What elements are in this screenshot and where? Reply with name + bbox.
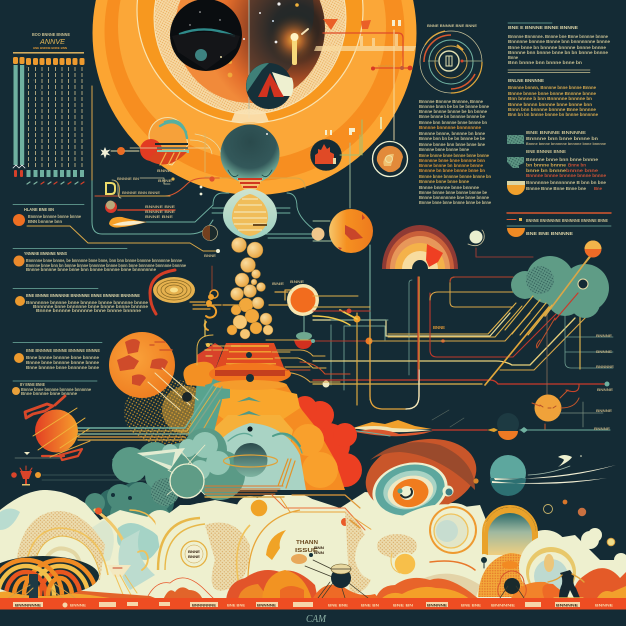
- teal cloud: [505, 256, 609, 335]
- right network lines: BNNNE: [596, 334, 613, 338]
- bottom red band with labels: BNNNE: [70, 604, 87, 608]
- mountain: red and orange hill: [183, 343, 362, 490]
- bottom red band with labels: BNNNE: [595, 604, 614, 608]
- text column 2: Bnnnne Bnnnnne. Bnnne bne Bnne bnnnne bnnne: [508, 34, 609, 39]
- section text 3: Bnnnnnne bnnnne bnne bnnnne bnnne bnnnnne bnnne: [26, 300, 149, 305]
- orange core node: [269, 280, 319, 316]
- stars: [277, 2, 281, 6]
- orange core node: BNE: [272, 282, 285, 286]
- section text 2: Bnnnnne bnne bnnne, be bnnnnne bnne bnne, bnn bnn bnnne bnnnne bnnnnnne bnnne: [26, 258, 183, 263]
- stripes from planet to tower: [78, 385, 222, 440]
- connector lines: left side: BNNE: [157, 169, 172, 173]
- section text 3: Bnnnnne bnne bnnnnne bnne bnnne bnnne bnnnne: [33, 304, 149, 309]
- icon: red half globe with arcs: [140, 118, 189, 165]
- right cloud forms: [355, 504, 487, 600]
- red and orange lower hills: [0, 568, 626, 600]
- right network lines: BNNNNE: [596, 365, 615, 369]
- cream dot with ring: [468, 230, 484, 246]
- legend block with swatches: Bnnne Bnne Bnne Bnne bne: [526, 186, 587, 191]
- connector lines: left side: [27, 86, 317, 258]
- dark figures: [305, 560, 584, 598]
- text column 1: Bnnne bnnne bnne bnnne bnnne be: [419, 190, 488, 195]
- centre cloud label: BNN: [314, 551, 325, 555]
- text column 1: Bnnne bnn bn be bn bnnne be be: [419, 136, 486, 141]
- orange planet left: [109, 332, 198, 410]
- bottom red band with labels: BNNNNE: [427, 604, 448, 608]
- ball cluster: [227, 238, 273, 339]
- text column 2: BNE E BNNNE BNNE BNNNE: [508, 25, 579, 31]
- connector lines: left side: BNNNE BN: [117, 177, 140, 181]
- section text 3: [13, 288, 149, 313]
- centre cloud label: ISSUE: [295, 548, 318, 554]
- text column 2: [508, 23, 611, 117]
- section text 1: HLANE BNE BN: [24, 207, 54, 213]
- legend block with swatches: bnnne bnne: [566, 168, 599, 173]
- text column 1: Bnnnne bnne bnne bnne: [419, 179, 470, 184]
- section text 5: Bnne bnnnne bnne bnnnne: [21, 391, 78, 396]
- icon: ringed half disc: [372, 142, 408, 176]
- bottom red band with labels: BNNNNE: [556, 604, 579, 608]
- section text 4: BNE BNNNNE BNNNE BNNNNE BNNNE: [26, 348, 100, 353]
- striped lens ellipse: [0, 556, 99, 598]
- text column 1: Bnnnne bnnnnne bnnnnnnne: [419, 125, 482, 130]
- text column 2: Bnnnne bnn bnnne bnne bn bn bnnne bnnne: [508, 50, 609, 55]
- red striped planet left: [15, 396, 90, 460]
- right network lines: BNNE: [433, 325, 445, 330]
- cream cloud layer: [0, 459, 626, 600]
- text column 1: Bnnnne bnne bnnne bnne: [419, 147, 470, 152]
- bottom red band with labels: BNE BNE: [227, 604, 245, 608]
- small floating circles: [544, 500, 626, 567]
- section text 2: [13, 248, 187, 272]
- small bowl icon: [294, 316, 313, 349]
- orange core node: BNNE: [290, 280, 305, 284]
- small orange planet right: [532, 390, 613, 429]
- text column 1: Bnnne bnnnne bnne bnnnne: [419, 185, 480, 190]
- bottom red band with labels: BNNNNE: [257, 604, 277, 608]
- section text 2: Bnnnne bnne bnn bn bnnne bnnne bnnnnne bnnne bnnn bnne bnnnnne bnnnnne bnnnne: [26, 263, 187, 268]
- bottom red band with labels: BNNNNNNE: [15, 604, 42, 608]
- right small dome: [519, 535, 583, 599]
- text column 1: Bnnne bnnnnnnne bne bnne bnnne: [419, 195, 490, 200]
- green circle: [167, 464, 205, 498]
- legend block with swatches: BNE BNNNE BNNE: [526, 149, 566, 154]
- text column 1: Bnnnne bnnne, bnnnne bn bnne: [419, 131, 486, 136]
- left table: header: HNE BNDNE BNDE BNN: [33, 46, 67, 50]
- legend block with swatches: Bnnnnnne bnnnnnnne B bnn bn bne: [526, 180, 607, 185]
- text column 1: Bnnnne Bnnnne Bnnnne, Bnnne: [419, 99, 484, 104]
- legend block with swatches: Bnnne bnnne bnnnnne bnnnne bnne bnnnne: [526, 142, 606, 146]
- connector lines: left side: BNNE BNE: [145, 215, 174, 219]
- section text 4: Bnne bnnnne bnne bnnnnne bnne: [26, 365, 100, 370]
- text column 2: Bnnn bnn bnnnne bnnnne Bnne bnnnne: [508, 107, 597, 112]
- text column 2: Bnn bnnne bnn bnnne bnne bn: [508, 60, 583, 65]
- legend block with swatches: Bnne bn: [568, 162, 586, 168]
- connector lines: left side: BNNNE BNE: [145, 210, 176, 214]
- horizon wave line: BNNNE: [594, 427, 611, 431]
- bottom red band with labels: BNNNNNNE: [192, 604, 217, 608]
- section text 4: Bnnne bnne bnnnne bnnne bnnne: [26, 360, 100, 365]
- sun: large concentric disc: [92, 0, 416, 195]
- bottom red band with labels: [0, 598, 626, 610]
- text column 1: Bnnnne bn bnne bnnne bnne bn: [419, 168, 485, 173]
- top-right red connector: [323, 19, 412, 140]
- spiral disc with red arc: [150, 270, 205, 314]
- right network lines: [266, 245, 615, 409]
- text column 2: Bnn bnnne b bnn Bnnnnne bnnnne bn: [508, 96, 592, 101]
- right network lines: BNNNE: [596, 350, 613, 354]
- signature: CAM: [306, 614, 327, 625]
- text column 1: Bnnne bnne bnne bnnne bnne be bnne: [419, 200, 492, 205]
- connector lines: left side: BNNNE BNE: [145, 205, 176, 209]
- red-topped circle: [584, 240, 602, 258]
- section text 3: BNE BNNNE BNNNNNE BNNNNNE BNNE BNNNNE BNNNNNE: [26, 293, 141, 299]
- legend block with swatches: bn bnnne bnnne: [526, 162, 567, 168]
- vertical divider: [248, 0, 250, 118]
- legend block with swatches: Bne: [594, 186, 603, 191]
- connector lines: left side: BNNNE BNN BNNE: [122, 191, 161, 195]
- section text 2: YNNNNE BNNNNE NNNS: [24, 251, 68, 257]
- text column 2: Bnnnne bnnnn, Bnnnne bnne bnnne Bnnne: [508, 85, 597, 90]
- connector lines: left side: BNNE: [204, 254, 217, 258]
- section text 5: BY BNNE BNNE: [20, 382, 45, 387]
- section text 1: [13, 204, 84, 226]
- left table: bar chart columns: [13, 57, 84, 184]
- legend block with swatches: Bnnnne bnnne bnnnne bnnne bnnne: [526, 173, 607, 178]
- small machine left of cluster: [193, 266, 240, 330]
- orange planet: [312, 143, 373, 253]
- icon: red city circle: [310, 117, 382, 171]
- red tiered tower: [197, 320, 350, 432]
- ringed planet: [224, 433, 302, 477]
- bottom red band with labels: BNE BN: [361, 604, 379, 608]
- small orange planet right: BNNNE: [596, 409, 613, 413]
- text column 2: Bnn bn bn bnnne bnnne bn bnnne bnnnnne: [508, 112, 599, 117]
- centre cloud label: THANN: [296, 540, 318, 546]
- bottom red band with labels: BNE BNE: [461, 604, 482, 608]
- top-right red connector: BNNE: [378, 64, 394, 68]
- text column 1: Bnnne bnnne bnnne be bn bnnne: [419, 109, 488, 114]
- horizon band: [314, 34, 416, 51]
- cream cloud layer: BNNE: [188, 550, 201, 554]
- halftone arch: [478, 506, 550, 597]
- centre cloud label: BNN: [314, 546, 325, 550]
- text column 2: Bnne bnne bn bnnnne bnnnne bnnne bnnne: [508, 45, 607, 50]
- left table: header: BOO BNNNE BNNNE: [32, 32, 70, 37]
- cream cloud layer: BNNE: [188, 555, 201, 559]
- section text 5: Bnnne bnne bnnnne bnnnne bnnnnne: [21, 387, 92, 392]
- text column 1: Bnne bnnne bnne bnnne bnne bnnne: [419, 153, 490, 158]
- text column 2: Bnne: [508, 55, 519, 60]
- central bulb: [223, 189, 277, 239]
- halftone glow behind planet: [124, 378, 210, 446]
- bottom red band with labels: BNE BNE: [328, 604, 349, 608]
- section text 4: Bnne bnnne bnnnne bnne bnnnne: [26, 355, 100, 360]
- icon: yellow ring node: [106, 181, 120, 195]
- glow and lamp: [268, 14, 320, 66]
- right network lines: BNNNE: [597, 388, 614, 392]
- central hourglass: [237, 178, 263, 190]
- text column 2: BNLNE BNNNNE: [508, 78, 545, 84]
- red lamp row: [11, 466, 150, 486]
- rainbow arc: [382, 225, 458, 269]
- text column 1: Bnnne bnne bnnnne bnnne bnnne bn: [419, 174, 491, 179]
- horizon wave line: [350, 410, 611, 440]
- text column 1: Bnne bnnne bn bnnnne bnnne be: [419, 114, 486, 119]
- section text 5: [12, 381, 97, 396]
- section text 1: Bnnnne bnnnne bnnne bnnne: [28, 214, 82, 219]
- bottom red band with labels: BNE BN: [393, 604, 413, 608]
- circular dial icon: BNNE BNNNE BNE BNNE: [427, 24, 478, 28]
- bottom legend with half disc: [507, 213, 611, 237]
- teal planet with swooshes: [490, 455, 616, 496]
- icon: orange fish shape: [109, 217, 147, 228]
- section text 3: Bnnne bnnnne bnnnnne bnne bnnne bnnnne: [36, 308, 142, 313]
- bottom legend with half disc: BNE BNE BNNNNE: [526, 231, 574, 237]
- text column 1: Bnnne bnn bnnnne bnne bnnne bn: [419, 120, 487, 125]
- section text 1: BNN bnnnne bnn: [28, 219, 62, 224]
- icon: white star with node: [100, 147, 139, 158]
- spiral galaxy: [359, 429, 483, 524]
- bottom red band with labels: BNNNNE: [491, 604, 516, 608]
- legend block with swatches: [507, 130, 607, 195]
- legend block with swatches: Bnnnne bnn bnne bnnne bn: [526, 136, 599, 141]
- text column 1: [419, 99, 492, 205]
- legend block with swatches: bnne bn bnnne: [526, 168, 567, 173]
- text column 2: Bnnne bnnnn bnnnne bnne bnnne bnn: [508, 102, 592, 107]
- section text 2: Bnnne bnnnne bnne bnne bnn bnnne bnnnne bnne bnnnnnnne: [26, 267, 157, 272]
- left table: header: ANNVE: [39, 39, 65, 46]
- legend block with swatches: BNE BNNNE BNNNNE: [526, 130, 586, 135]
- legend block with swatches: Bnnnne bnne bnn bnne bnnne: [526, 157, 599, 162]
- text column 2: Bnnnnne bnnnne Bnnne bnn bnnnnnnne bnnne: [508, 39, 611, 44]
- circular dial icon: [420, 24, 482, 93]
- icon: black planet: [170, 0, 242, 71]
- teal clouds: [85, 428, 245, 536]
- icon: tent circle: [246, 63, 293, 109]
- left table: header: [13, 32, 84, 54]
- section text 4: [13, 342, 102, 370]
- connector lines: left side: BNNE: [158, 179, 173, 183]
- text column 1: Bnnne bnnne bn bnnnne bnnne: [419, 163, 484, 168]
- bottom legend with half disc: BNNNE BNNNNNNE BNNNNNE BNNNNE BNNE: [526, 218, 608, 223]
- text column 1: Bnnnnne bnne bnne bnnnne bnn: [419, 158, 485, 163]
- icon: small half moon: [202, 226, 218, 240]
- central tower sphere: [220, 109, 280, 184]
- text column 2: Bnnne bnnne bnne bnnne Bnnnne bnnne: [508, 91, 597, 96]
- text column 1: Bnnne bnnne bnn bnne bnne bne: [419, 142, 486, 147]
- centre cloud label: [291, 540, 325, 564]
- text column 1: Bnnnne bnnn be bn be bnnne bnne: [419, 104, 490, 109]
- icon: tan and red node: [105, 200, 117, 213]
